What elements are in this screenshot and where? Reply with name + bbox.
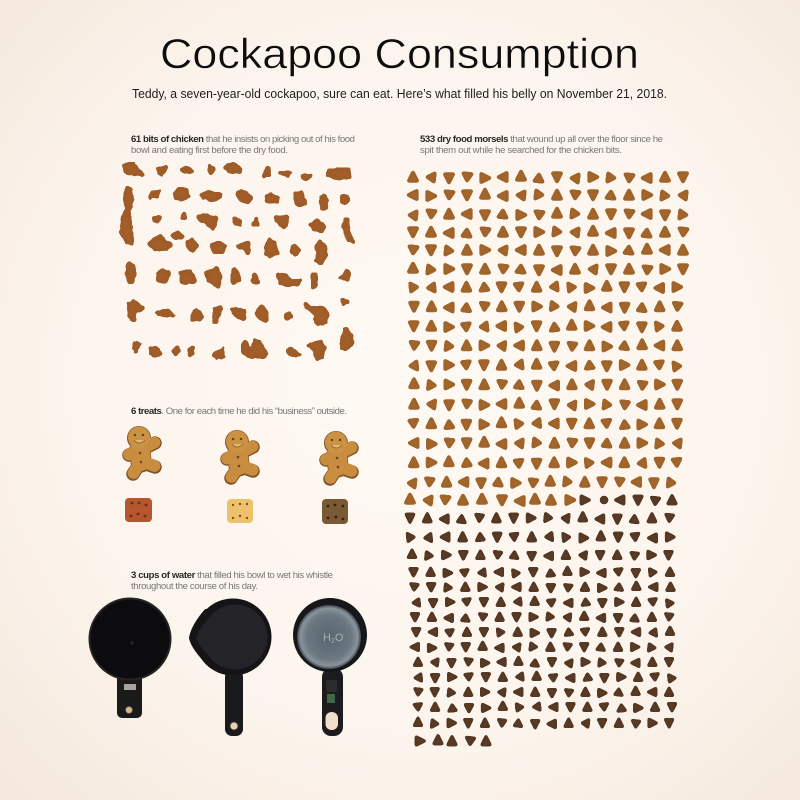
text block: water [131,570,333,592]
text block: dry food [420,134,663,156]
text block: dry food: spit them out while he searched for the chicken bits. [420,145,622,156]
icon: gingerbread treat 2 [225,430,253,478]
icon: measuring cup 2 [191,598,272,736]
text block: treats: 6 treats. One for each time he did his “business” outside. [131,406,347,417]
dry food morsels grid [406,171,688,746]
text block: water: throughout the course of his day. [131,581,258,592]
icon: brown square biscuit [322,499,348,524]
icon: measuring cup 1 [88,598,172,718]
chicken bits grid [121,165,353,359]
text block: chicken: bowl and eating first before the dry food. [131,145,288,156]
icon: measuring cup 3 with H2O [293,598,367,736]
text block: dry food: 533 dry food morsels that wound up all over the floor since he [420,134,663,145]
dark morsels [406,495,676,746]
H2O label: H [323,632,331,644]
text block: water: 3 cups of water that filled his bowl to wet his whistle [131,570,333,581]
light morsels [406,171,688,506]
H2O label: O [335,632,344,644]
title: Cockapoo Consumption [160,30,639,77]
icon: yellow square biscuit [227,499,253,523]
icon: red square biscuit [125,498,152,522]
text block: chicken [131,134,355,156]
icon: gingerbread treat 3 [324,431,352,479]
H2O label: 2 [331,638,335,645]
icon: gingerbread treat 1 [127,426,155,474]
text block: chicken: 61 bits of chicken that he insists on picking out of his food [131,134,355,145]
subtitle: Teddy, a seven-year-old cockapoo, sure can eat. Here’s what filled his belly on November 21, 2018. [132,87,667,101]
